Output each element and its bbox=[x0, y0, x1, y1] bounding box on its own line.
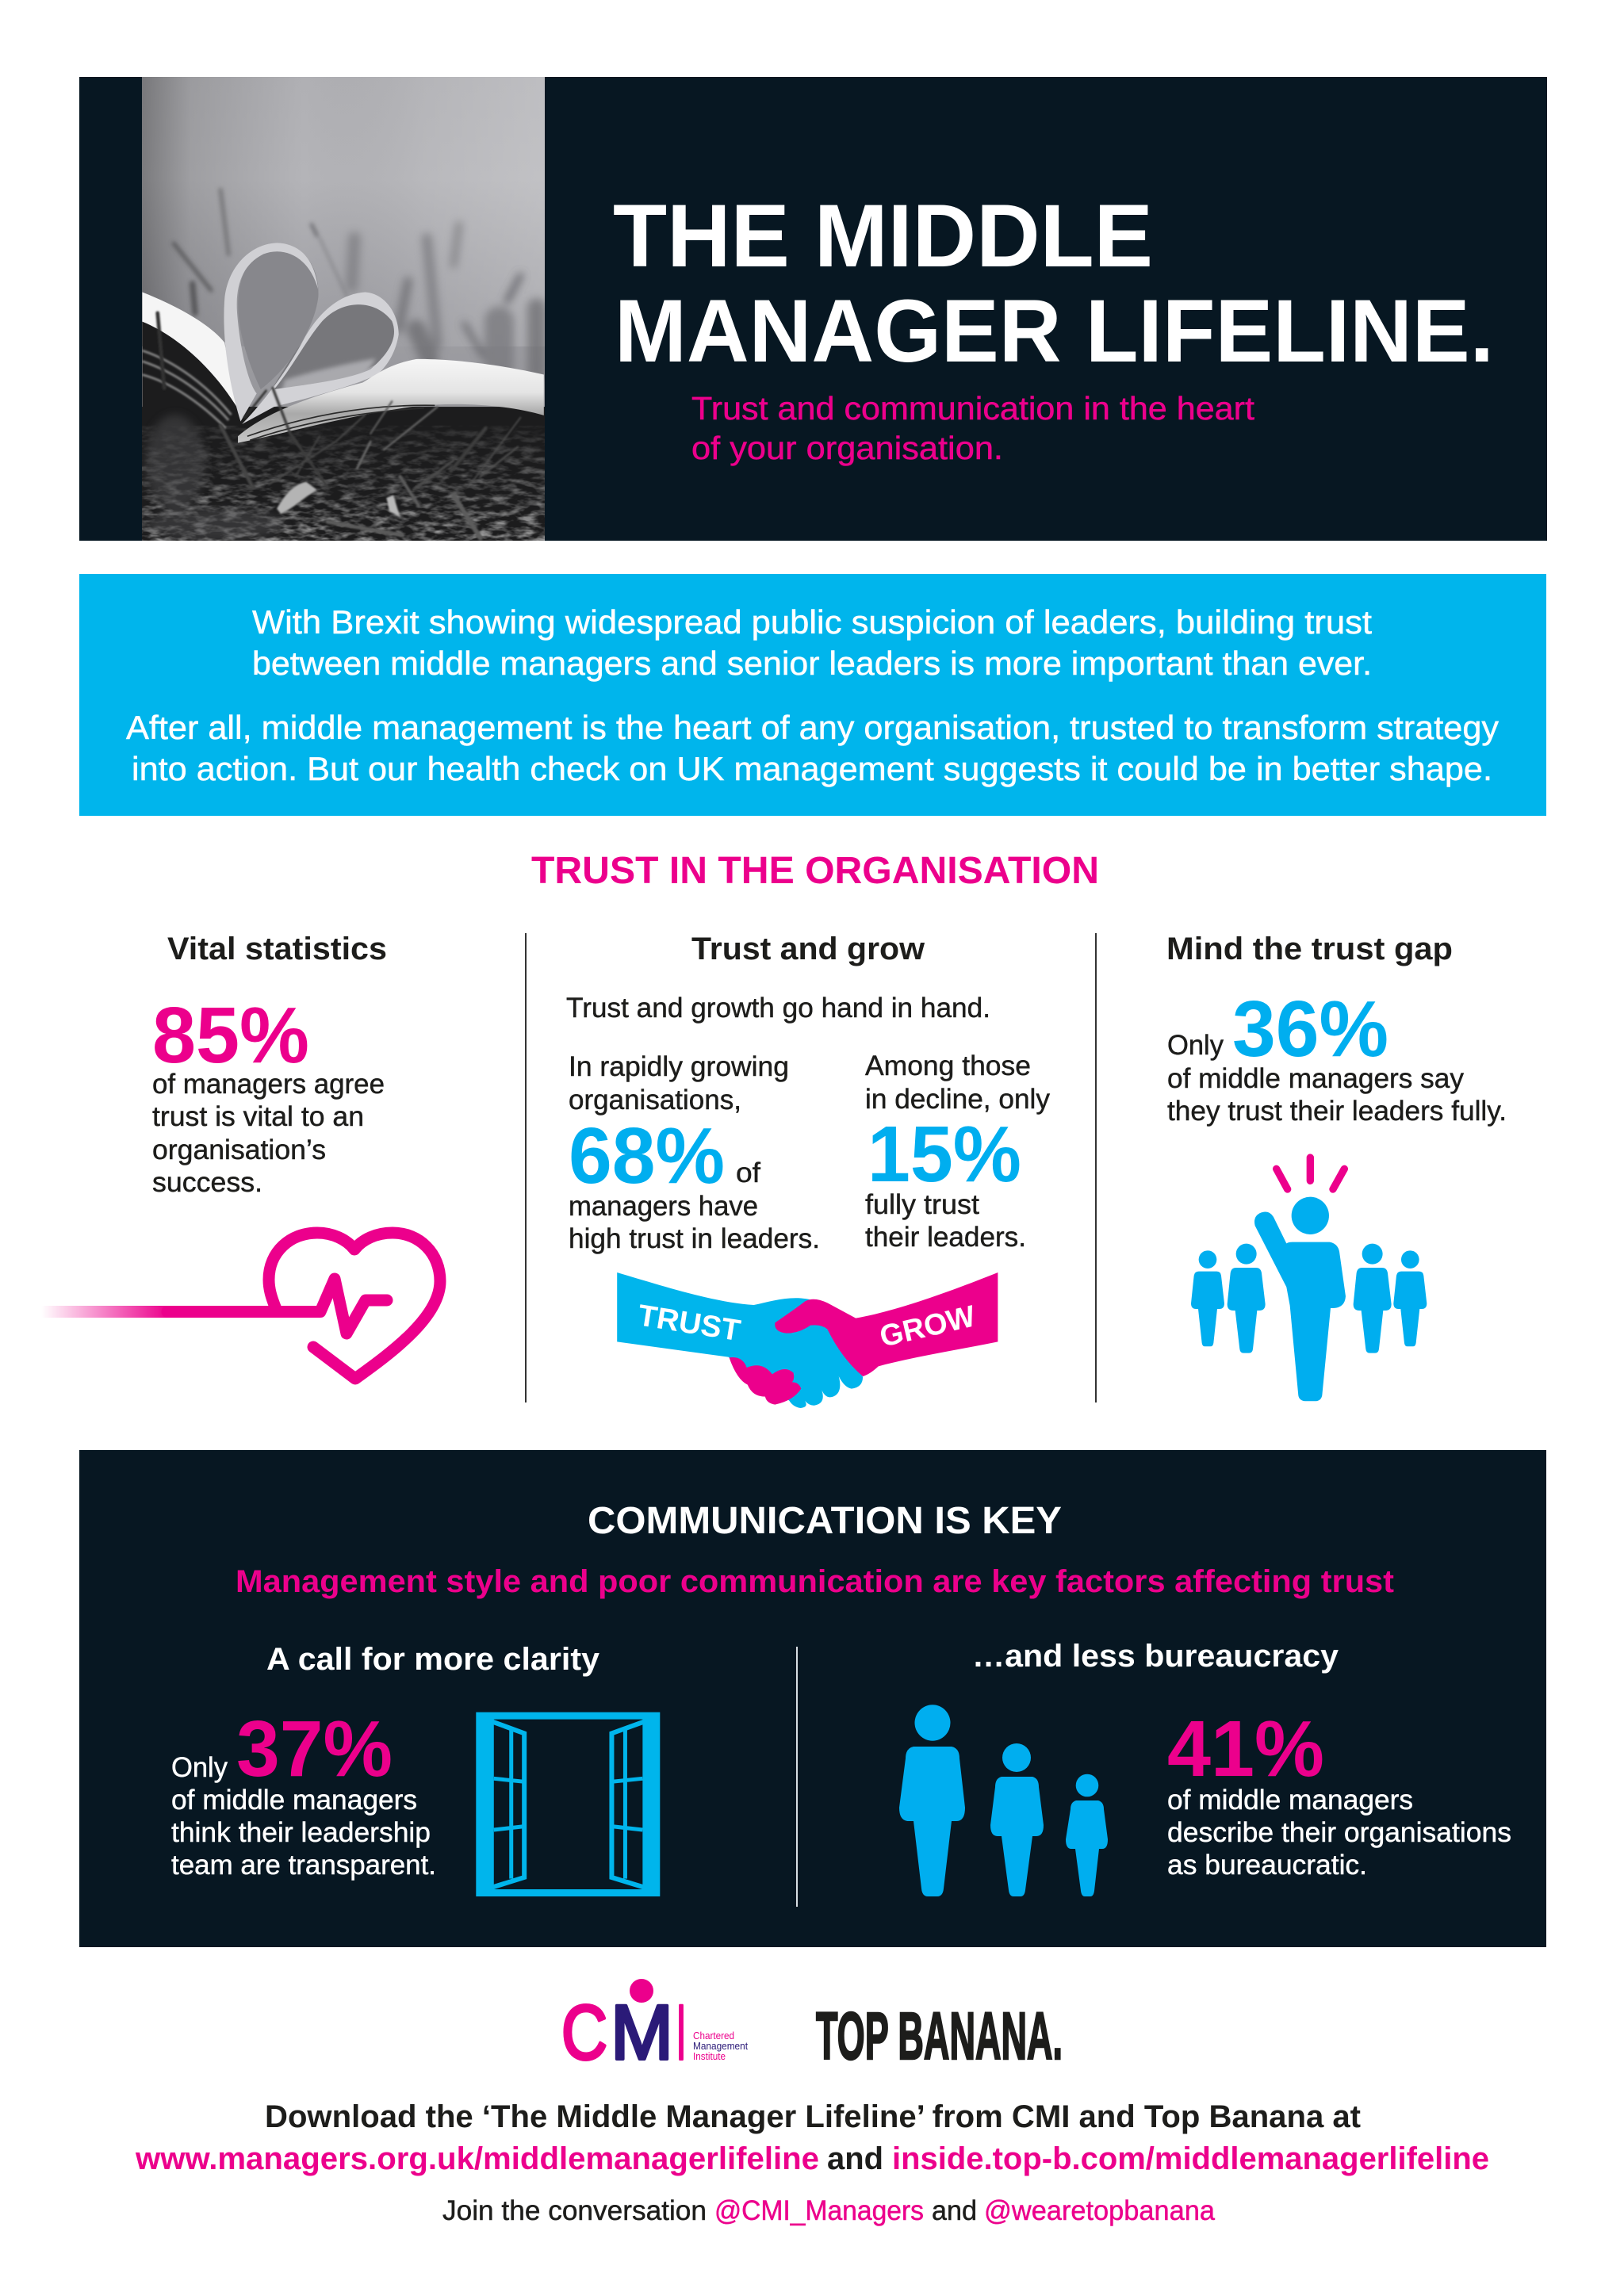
panel: introduction band bbox=[79, 574, 1546, 816]
icon: handshake trust and grow: TRUST bbox=[636, 1299, 743, 1348]
text: declining organisations stat: Among those bbox=[865, 1050, 1031, 1081]
panel: introduction band: With Brexit showing widespread public suspicion of leaders, building trust bbox=[252, 603, 1372, 641]
text: declining organisations stat: fully trust bbox=[865, 1189, 979, 1220]
stat: 36% bbox=[1167, 985, 1388, 1073]
text: 41% description: of middle managers bbox=[1167, 1785, 1413, 1816]
stat: 37%: Only bbox=[171, 1752, 228, 1783]
title bbox=[613, 186, 1494, 381]
icon: handshake trust and grow bbox=[617, 1272, 998, 1408]
text: 36% description bbox=[1167, 1063, 1507, 1127]
text: intro: Trust and growth go hand in hand. bbox=[566, 993, 990, 1024]
text: growing organisations stat bbox=[569, 1051, 820, 1254]
text: declining organisations stat: 15% bbox=[868, 1110, 1021, 1199]
icon: handshake trust and grow: GROW bbox=[877, 1299, 979, 1354]
heading: vital statistics: Vital statistics bbox=[167, 932, 387, 966]
footer: social handles: and bbox=[932, 2195, 977, 2226]
divider right bbox=[1095, 933, 1097, 1402]
panel: communication is key bbox=[79, 1450, 1546, 1947]
stat: 41%: 41% bbox=[1167, 1705, 1324, 1793]
text: 36% description: of middle managers say bbox=[1167, 1063, 1464, 1094]
subtitle: of your organisation. bbox=[691, 430, 1003, 466]
text: 37% description: of middle managers bbox=[171, 1785, 417, 1816]
footer: download text: Download the ‘The Middle Manager Lifeline’ from CMI and Top Banana at bbox=[265, 2099, 1361, 2134]
logo: Top Banana: TOP BANANA. bbox=[816, 1999, 1063, 2073]
text: 85% description: success. bbox=[152, 1167, 262, 1198]
subheading: key factors: Management style and poor communication are key factors affecting trust bbox=[236, 1564, 1394, 1599]
panel: introduction band: into action. But our health check on UK management suggests it could be in better shape. bbox=[132, 750, 1492, 787]
heading: trust and grow: Trust and grow bbox=[691, 932, 925, 966]
text: growing organisations stat: of bbox=[736, 1158, 760, 1188]
logo: CMI bbox=[561, 1979, 748, 2076]
text: 41% description: as bureaucratic. bbox=[1167, 1850, 1367, 1881]
text: growing organisations stat: organisations, bbox=[569, 1085, 741, 1115]
text: 85% description: organisation’s bbox=[152, 1135, 326, 1165]
text: growing organisations stat: high trust in leaders. bbox=[569, 1223, 820, 1254]
logo: CMI: M bbox=[611, 1989, 673, 2076]
panel: header bbox=[79, 77, 1547, 549]
footer: links bbox=[135, 2141, 1489, 2176]
panel: introduction band: between middle managers and senior leaders is more important than ever. bbox=[252, 645, 1372, 682]
text: 41% description bbox=[1167, 1785, 1511, 1881]
footer: social handles: Join the conversation bbox=[442, 2195, 707, 2226]
text: declining organisations stat bbox=[865, 1050, 1050, 1253]
heading: a call for more clarity: A call for more clarity bbox=[266, 1642, 600, 1677]
logo: CMI: Chartered bbox=[693, 2030, 734, 2042]
stat: 36%: 36% bbox=[1232, 985, 1388, 1073]
text: 37% description bbox=[171, 1785, 436, 1881]
logo: CMI: I bbox=[676, 1989, 686, 2076]
icon: three people of decreasing size bbox=[899, 1705, 1108, 1896]
divider left bbox=[525, 933, 527, 1402]
text: 41% description: describe their organisations bbox=[1167, 1817, 1511, 1848]
text: 85% description bbox=[152, 1069, 385, 1198]
panel: trust and grow bbox=[566, 932, 1050, 1408]
logo: CMI: Institute bbox=[693, 2050, 726, 2062]
stat: 37% bbox=[171, 1705, 393, 1793]
icon: open window bbox=[476, 1712, 660, 1896]
title: MANAGER LIFELINE. bbox=[615, 281, 1494, 381]
footer: social handles: @CMI_Managers bbox=[714, 2195, 924, 2226]
footer: links: inside.top-b.com/middlemanagerlifeline bbox=[892, 2141, 1489, 2176]
heading: mind the trust gap: Mind the trust gap bbox=[1166, 932, 1453, 966]
panel: vital statistics bbox=[41, 932, 440, 1379]
footer: links: and bbox=[827, 2141, 883, 2176]
text: 85% description: of managers agree bbox=[152, 1069, 385, 1100]
subtitle bbox=[691, 390, 1255, 466]
photo: book with heart-shaped pages in grass bbox=[135, 77, 553, 549]
heading: communication is key: COMMUNICATION IS KEY bbox=[588, 1500, 1062, 1542]
footer: social handles: @wearetopbanana bbox=[984, 2195, 1216, 2226]
heading: and less bureaucracy: …and less bureaucracy bbox=[972, 1639, 1339, 1674]
stat: 36%: Only bbox=[1167, 1030, 1224, 1061]
icon: leader raising hand among people bbox=[1191, 1158, 1427, 1401]
stat: 85%: 85% bbox=[152, 991, 309, 1080]
title: THE MIDDLE bbox=[613, 186, 1153, 285]
text: 37% description: team are transparent. bbox=[171, 1850, 436, 1881]
divider centre bbox=[796, 1647, 798, 1907]
text: growing organisations stat: In rapidly growing bbox=[569, 1051, 789, 1082]
icon: heart with pulse line bbox=[41, 1233, 440, 1379]
logo: CMI: C bbox=[561, 1989, 607, 2076]
panel: mind the trust gap bbox=[1166, 932, 1507, 1401]
text: declining organisations stat: in decline, only bbox=[865, 1084, 1050, 1115]
subtitle: Trust and communication in the heart bbox=[691, 390, 1255, 427]
text: growing organisations stat: 68% bbox=[569, 1112, 725, 1200]
heading: trust in the organisation: TRUST IN THE ORGANISATION bbox=[531, 850, 1099, 892]
text: 85% description: trust is vital to an bbox=[152, 1101, 364, 1132]
stat: 37%: 37% bbox=[236, 1705, 393, 1793]
text: growing organisations stat: managers have bbox=[569, 1191, 758, 1222]
logo: CMI: Management bbox=[693, 2040, 748, 2052]
footer: links: www.managers.org.uk/middlemanagerlifeline bbox=[135, 2141, 819, 2176]
text: declining organisations stat: their leaders. bbox=[865, 1222, 1026, 1253]
footer: social handles bbox=[442, 2195, 1216, 2226]
text: 37% description: think their leadership bbox=[171, 1817, 431, 1848]
panel: introduction band: After all, middle management is the heart of any organisation, trusted to transform strategy bbox=[126, 709, 1499, 746]
text: 36% description: they trust their leaders fully. bbox=[1167, 1096, 1507, 1127]
